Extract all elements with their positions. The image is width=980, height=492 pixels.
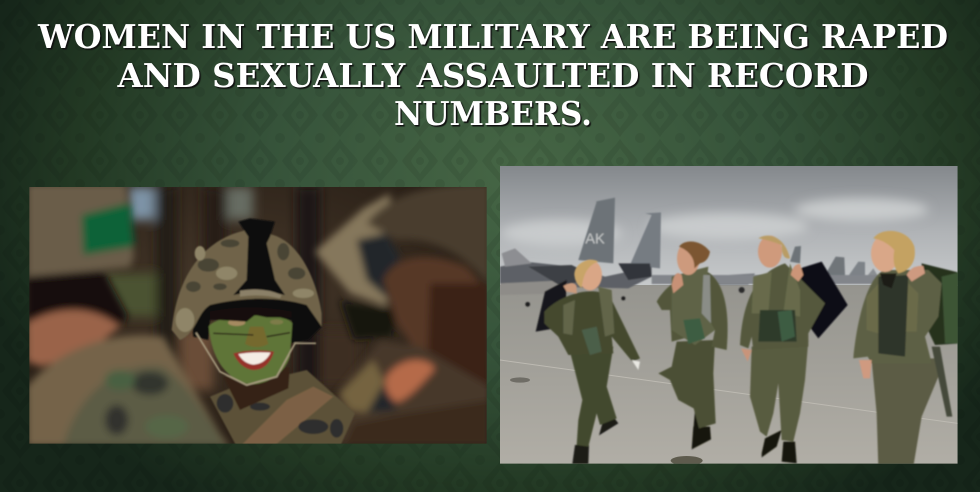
helmet mount: [233, 218, 285, 295]
helmet shadow: [190, 297, 322, 343]
blurred marine at right: [315, 183, 490, 447]
title: [37, 17, 948, 133]
goggles straps: [210, 307, 292, 322]
chin strap: [196, 333, 316, 385]
title: NUMBERS.: [394, 94, 592, 133]
title: WOMEN IN THE US MILITARY ARE BEING RAPED: [37, 17, 948, 56]
central marine: [172, 218, 355, 447]
sky: [500, 166, 958, 286]
uniform: [210, 370, 355, 447]
smile: [233, 350, 274, 370]
blurred marine at left: [27, 183, 230, 447]
fighter jets: AK: [585, 231, 605, 247]
fighter jets: [500, 198, 878, 307]
face: [209, 316, 292, 384]
neck: [223, 367, 290, 410]
title: AND SEXUALLY ASSAULTED IN RECORD: [117, 56, 868, 95]
photo: smiling marine with face paint: [27, 183, 490, 447]
tarmac: [500, 285, 958, 465]
pilot 2: [657, 241, 728, 449]
helmet: [172, 230, 322, 340]
photo: four female pilots on the tarmac: [500, 166, 962, 467]
pilot 1: [536, 260, 640, 464]
pilot 3 with black bag: [740, 236, 848, 463]
pilot 4 with backpack: [853, 231, 962, 467]
forest background: [29, 187, 487, 444]
